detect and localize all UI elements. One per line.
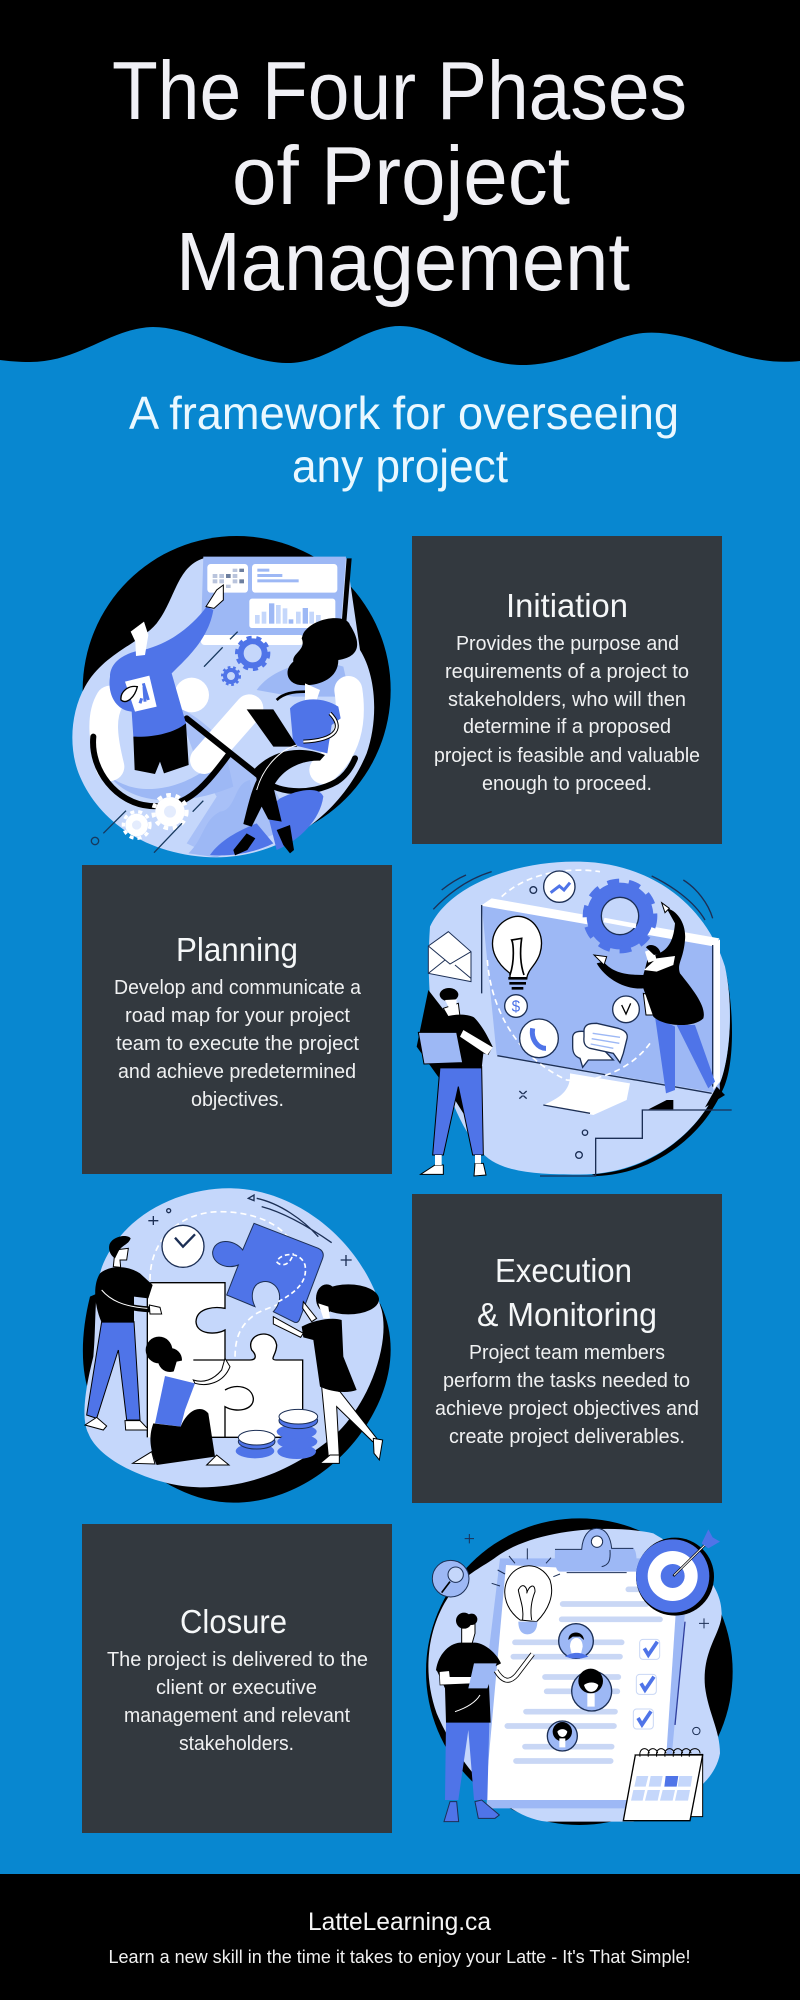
panel: initiation: requirements of a project to [445,660,689,683]
icon: light bulb with rays [492,1548,560,1634]
icon: large gear [587,883,653,949]
panel: closure: client or executive [156,1676,317,1699]
person: figure on stairs placing gear [594,903,725,1109]
header wave band [0,0,800,365]
title: Management [176,215,630,308]
lower decorative gears and hills [123,780,323,857]
icon: chat bubbles [573,1023,627,1067]
illustration: execution team assembling puzzle [83,1188,391,1503]
icon: light bulb [492,916,541,988]
monitor [481,870,720,1115]
checklist lines [507,1589,660,1761]
person: presenter [436,1613,533,1822]
illustration: planning team with monitor [417,862,732,1176]
person: man pointing [109,585,223,774]
person: kneeling woman [133,1337,230,1465]
infinity ribbon [93,678,355,806]
panel: planning [82,865,392,1174]
screen dashboard [201,557,346,645]
person: woman with laptop [233,618,357,855]
subtitle [129,387,679,492]
panel: planning: Develop and communicate a [114,976,362,999]
panel: closure: management and relevant [124,1704,350,1727]
icon: desk calendar [623,1749,703,1821]
panel: planning: Planning [176,931,298,968]
illustration: initiation team with dashboard [72,536,391,857]
panel: initiation: determine if a proposed [463,715,671,738]
panel: execution and monitoring: Project team members [469,1341,665,1364]
panel: execution and monitoring: Execution [495,1252,632,1289]
panel: closure: The project is delivered to the [107,1648,368,1671]
subtitle: any project [292,440,508,492]
icon: target with arrow [636,1529,720,1616]
person: man holding puzzle [85,1236,162,1430]
panel: initiation: stakeholders, who will then [448,688,686,711]
clipboard [485,1528,690,1808]
person: man with tablet [417,988,493,1176]
panel: closure: Closure [180,1603,287,1640]
panel: execution and monitoring [412,1194,722,1503]
panel: execution and monitoring: create project deliverables. [449,1425,685,1448]
panel: initiation: Provides the purpose and [456,632,679,655]
panel: initiation: Initiation [506,587,628,624]
footer text: Learn a new skill in the time it takes to enjoy your Latte - It's That Simple! [108,1946,690,1967]
icon: envelope [428,932,471,982]
panel: execution and monitoring: perform the tasks needed to [443,1369,690,1392]
icon: clock [162,1225,204,1267]
panel: initiation [412,536,722,844]
illustration: closure checklist clipboard [426,1518,733,1825]
panel: execution and monitoring: & Monitoring [477,1296,657,1333]
puzzle: blue piece [213,1223,323,1323]
panel: execution and monitoring: achieve project objectives and [435,1397,699,1420]
icon: magnifier [432,1560,469,1597]
panel: closure [82,1524,392,1833]
icon: coin stacks [236,1409,318,1459]
person: standing woman with dark hair [273,1284,383,1463]
panel: initiation: enough to proceed. [482,772,652,795]
panel: planning: and achieve predetermined [118,1060,356,1083]
footer text [108,1908,690,1967]
title: of Project [232,129,570,222]
footer band [0,1874,800,2000]
icons: team avatars [547,1624,612,1751]
panel: closure: stakeholders. [179,1732,294,1755]
title: The Four Phases [112,44,687,137]
icons: check boxes [633,1639,660,1729]
panel: planning: road map for your project [125,1004,350,1027]
puzzle: white pieces [147,1283,303,1437]
panel: initiation: project is feasible and valuable [434,744,700,767]
subtitle: A framework for overseeing [129,387,679,439]
panel: planning: objectives. [191,1088,284,1111]
stairs [540,1110,732,1176]
icon: gears [222,638,268,685]
footer text: LatteLearning.ca [308,1908,491,1936]
title [112,44,687,308]
icons: circle badges [505,871,639,1058]
panel: planning: team to execute the project [116,1032,359,1055]
illustration: planning team with monitor: $ [512,999,521,1016]
